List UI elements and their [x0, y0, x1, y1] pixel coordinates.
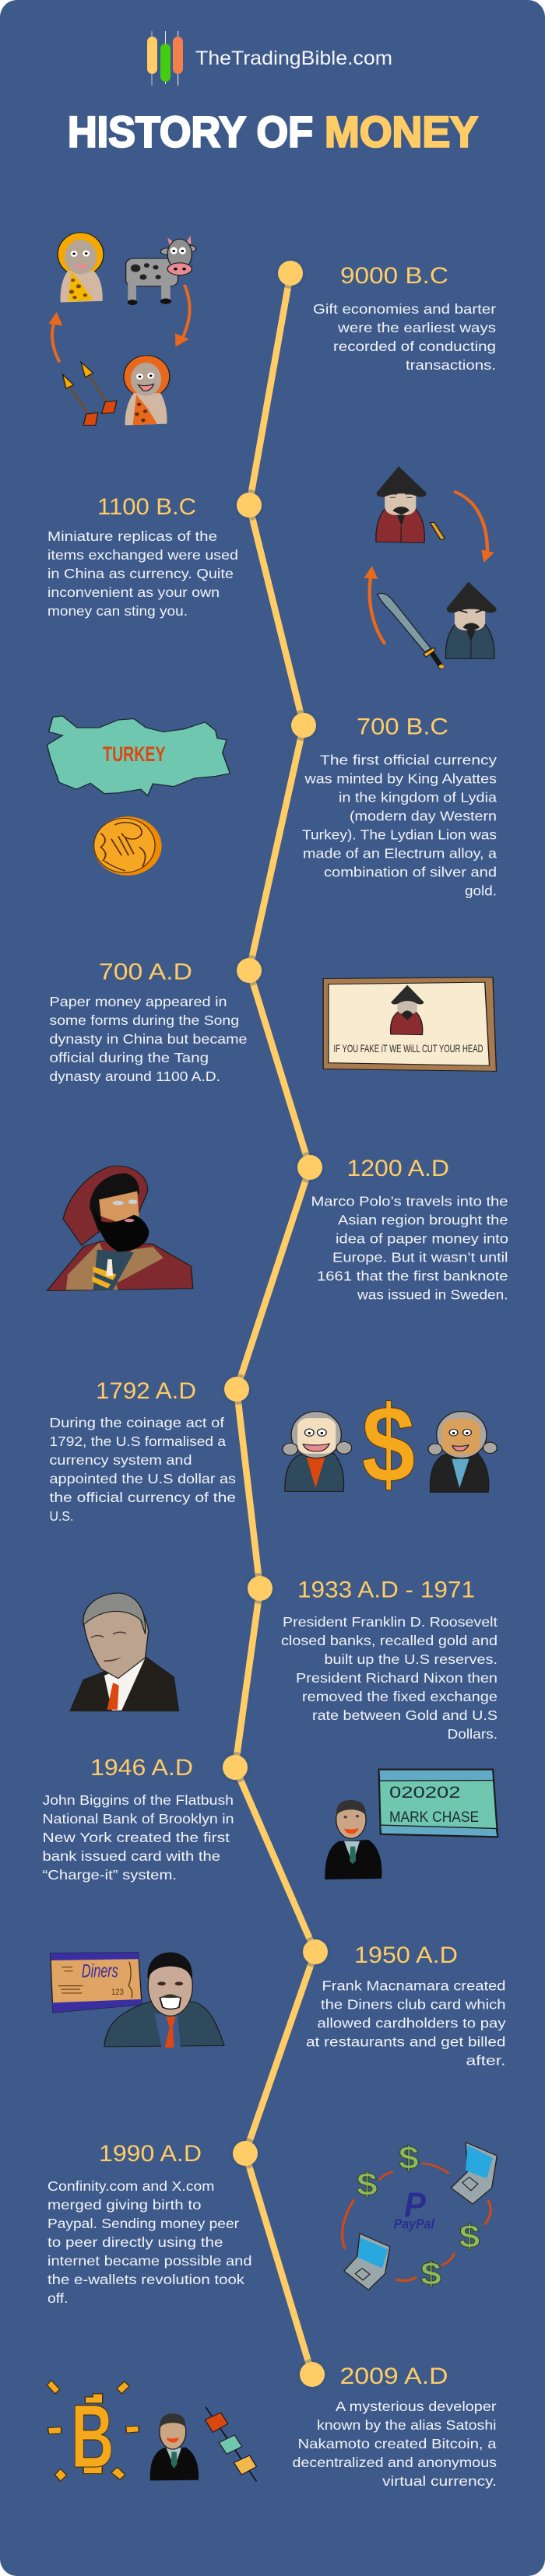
illustration: barter between cavemen: [48, 233, 196, 425]
cycle arrows: [343, 2164, 490, 2280]
entry: 700 A.D: dynasty in China but became: [50, 1031, 248, 1047]
entry: 1933 A.D - 1971: closed banks, recalled gold and: [281, 1633, 498, 1648]
entry: 1990 A.D: to peer directly using the: [47, 2234, 223, 2250]
dollar coins: $: [459, 2220, 480, 2255]
entry: 9000 B.C: 9000 B.C: [340, 263, 448, 289]
entry: 1946 A.D: National Bank of Brooklyn in: [42, 1811, 234, 1827]
wigged man in blue coat: [283, 1412, 352, 1491]
title: MONEY: [325, 107, 478, 156]
entry: 1792 A.D: currency system and: [50, 1452, 192, 1468]
entry: 1933 A.D - 1971: President Richard Nixon then: [296, 1670, 498, 1686]
illustration: founding fathers and dollar sign: [283, 1382, 497, 1505]
illustration: man with charge card: [325, 1769, 498, 1879]
entry: 1100 B.C: in China as currency. Quite: [47, 566, 234, 581]
entry: 1933 A.D - 1971: 1933 A.D - 1971: [297, 1577, 475, 1603]
wigged man in black coat: [428, 1412, 497, 1492]
entry: 700 B.C: made of an Electrum alloy, a: [303, 845, 497, 861]
entry: 1946 A.D: bank issued card with the: [42, 1848, 220, 1864]
man with tie: [104, 1953, 224, 2048]
entry: 9000 B.C: were the earliest ways: [337, 320, 496, 335]
coin: [93, 816, 162, 876]
entry: 1792 A.D: appointed the U.S dollar as: [50, 1471, 236, 1486]
illustration: knife money trade: [364, 466, 497, 669]
illustration: PayPal money cycle: [343, 2141, 497, 2293]
caveman with yellow hair: [58, 233, 104, 303]
dollar coins: $: [420, 2257, 441, 2293]
entry: 1946 A.D: “Charge-it” system.: [42, 1867, 177, 1883]
timeline line: [220, 258, 331, 2390]
entry: 1950 A.D: allowed cardholders to pay: [318, 2016, 506, 2031]
Diners card: [51, 1953, 142, 2013]
bitcoin symbol: [47, 2381, 139, 2487]
entry: 1990 A.D: Paypal. Sending money peer: [47, 2216, 239, 2231]
entry: 2009 A.D: decentralized and anonymous: [293, 2455, 497, 2470]
entry: 700 A.D: Paper money appeared in: [50, 994, 227, 1009]
Satoshi Nakamoto figure: [150, 2413, 199, 2480]
entry: 1200 A.D: Europe. But it wasn’t until: [332, 1250, 508, 1265]
entry: 700 A.D: 700 A.D: [99, 959, 192, 985]
entry: 1200 A.D: Marco Polo’s travels into the: [311, 1194, 508, 1209]
charge card: 020202: [389, 1784, 460, 1802]
entry: 9000 B.C: Gift economies and barter: [313, 301, 496, 317]
entry: 1100 B.C: inconvenient as your own: [47, 584, 220, 600]
entry: 1990 A.D: off.: [47, 2290, 69, 2306]
laptop lower left: [344, 2234, 390, 2290]
exchange arrows: [364, 492, 494, 643]
entry: 1950 A.D: 1950 A.D: [354, 1943, 458, 1968]
entry: 2009 A.D: [293, 2364, 497, 2489]
cow: [126, 235, 196, 305]
exchange arrows: [48, 286, 190, 361]
entry: 2009 A.D: virtual currency.: [382, 2473, 497, 2489]
entry: 1200 A.D: Asian region brought the: [338, 1213, 508, 1228]
map of Turkey: TURKEY: [103, 742, 165, 766]
logo: [147, 31, 392, 86]
entry: 700 B.C: combination of silver and: [324, 864, 497, 879]
illustration: Frank McNamara with Diners card: [51, 1953, 224, 2048]
entry: 1933 A.D - 1971: rate between Gold and U.S: [312, 1707, 498, 1723]
entry: 700 B.C: was minted by King Alyattes: [304, 770, 497, 786]
entry: 1950 A.D: after.: [466, 2053, 506, 2069]
entry: 1946 A.D: 1946 A.D: [90, 1755, 193, 1781]
entry: 1792 A.D: 1792 A.D: [96, 1378, 196, 1404]
entry: 700 B.C: in the kingdom of Lydia: [339, 789, 497, 805]
entry: 1946 A.D: New York created the first: [42, 1830, 230, 1845]
entry: 1792 A.D: During the coinage act of: [50, 1415, 224, 1430]
laptop upper right: [451, 2143, 497, 2204]
man in black suit: [325, 1800, 382, 1879]
entry: 1950 A.D: at restaurants and get billed: [306, 2034, 506, 2050]
entry: 700 B.C: (modern day Western: [350, 808, 497, 823]
illustration: paper banknote: [323, 977, 496, 1071]
entry: 9000 B.C: recorded of conducting: [333, 339, 496, 354]
entry: 700 B.C: The first official currency: [320, 752, 497, 767]
title: [68, 107, 478, 156]
dollar coins: $: [357, 2167, 378, 2202]
entry: 1792 A.D: 1792, the U.S formalised a: [50, 1434, 226, 1449]
entry: 1792 A.D: [50, 1378, 236, 1524]
entry: 1950 A.D: [306, 1943, 506, 2069]
entry: 1990 A.D: internet became possible and: [47, 2253, 252, 2269]
entry: 1990 A.D: merged giving birth to: [47, 2197, 201, 2213]
entry: 1990 A.D: 1990 A.D: [99, 2141, 202, 2167]
entry: 700 A.D: some forms during the Song: [50, 1013, 239, 1028]
entry: 1200 A.D: 1200 A.D: [347, 1156, 449, 1181]
man in red robe: [376, 466, 427, 542]
man in blue robe: [446, 581, 497, 658]
blockchain cubes: [205, 2407, 256, 2481]
entry: 700 A.D: [50, 959, 248, 1084]
illustration: Roosevelt portrait: [70, 1593, 178, 1711]
entry: 700 B.C: [302, 714, 497, 898]
entry: 9000 B.C: transactions.: [406, 357, 496, 373]
entry: 700 B.C: Turkey). The Lydian Lion was: [302, 826, 497, 842]
entry: 1200 A.D: 1661 that the first banknote: [317, 1269, 508, 1284]
sword: [378, 593, 444, 669]
entry: 1100 B.C: 1100 B.C: [97, 494, 196, 520]
entry: 1933 A.D - 1971: removed the fixed exchange: [302, 1689, 498, 1704]
charge card: MARK CHASE: [389, 1809, 479, 1825]
entry: 700 A.D: dynasty around 1100 A.D.: [50, 1069, 220, 1084]
illustration: Marco Polo portrait: [47, 1166, 193, 1291]
entry: 1990 A.D: the e-wallets revolution took: [47, 2272, 244, 2287]
entry: 1950 A.D: the Diners club card which: [321, 1997, 506, 2013]
illustration: Turkey map and Lydian lion coin: [47, 716, 230, 876]
logo: TheTradingBible.com: [195, 47, 392, 69]
Diners card: Diners: [82, 1960, 118, 1981]
entry: 1946 A.D: John Biggins of the Flatbush: [42, 1792, 234, 1808]
PayPal logo: PayPal: [394, 2217, 434, 2232]
entry: 1933 A.D - 1971: President Franklin D. Roosevelt: [283, 1614, 498, 1630]
entry: 1100 B.C: [47, 494, 238, 619]
map of Turkey: [47, 716, 230, 795]
illustration: Bitcoin, Satoshi and blockchain: [47, 2381, 256, 2487]
dollar coins: [357, 2141, 480, 2293]
title: HISTORY OF: [68, 107, 313, 156]
entry: 1100 B.C: Miniature replicas of the: [47, 528, 217, 544]
PayPal logo: P: [404, 2185, 426, 2224]
entry: 1100 B.C: items exchanged were used: [47, 547, 238, 563]
entry: 9000 B.C: [313, 263, 496, 373]
Diners card: 123: [111, 1987, 124, 1997]
entry: 700 B.C: gold.: [465, 883, 497, 898]
entry: 1792 A.D: U.S.: [50, 1508, 73, 1524]
charge card: [379, 1769, 498, 1837]
entry: 1946 A.D: [42, 1755, 234, 1883]
small knife: [430, 522, 445, 540]
entry: 2009 A.D: Nakamoto created Bitcoin, a: [297, 2436, 497, 2451]
arrows offered for trade: [62, 362, 117, 425]
entry: 2009 A.D: known by the alias Satoshi: [317, 2417, 497, 2433]
banknote portrait: [391, 985, 424, 1035]
entry: 1950 A.D: Frank Macnamara created: [322, 1978, 506, 1994]
entry: 2009 A.D: A mysterious developer: [336, 2399, 497, 2414]
entry: 1200 A.D: idea of paper money into: [336, 1231, 508, 1247]
entry: 700 B.C: 700 B.C: [357, 714, 448, 739]
PayPal logo: [394, 2185, 434, 2232]
entry: 1100 B.C: money can sting you.: [47, 603, 188, 619]
bitcoin symbol: B: [71, 2387, 114, 2487]
entry: 1933 A.D - 1971: [281, 1577, 498, 1742]
entry: 1990 A.D: [47, 2141, 252, 2306]
dollar coins: $: [399, 2141, 419, 2177]
dollar sign: $: [361, 1382, 415, 1505]
entry: 1200 A.D: [311, 1156, 508, 1303]
entry: 1990 A.D: Confinity.com and X.com: [47, 2178, 215, 2194]
entry: 1933 A.D - 1971: Dollars.: [447, 1726, 498, 1742]
entry: 2009 A.D: 2009 A.D: [339, 2364, 448, 2389]
entry: 1200 A.D: was issued in Sweden.: [357, 1287, 508, 1303]
entry: 1792 A.D: the official currency of the: [50, 1490, 236, 1505]
caveman with orange hair: [124, 356, 170, 425]
entry: 1933 A.D - 1971: built up the U.S reserves.: [324, 1651, 498, 1667]
entry: 700 A.D: official during the Tang: [50, 1050, 209, 1065]
